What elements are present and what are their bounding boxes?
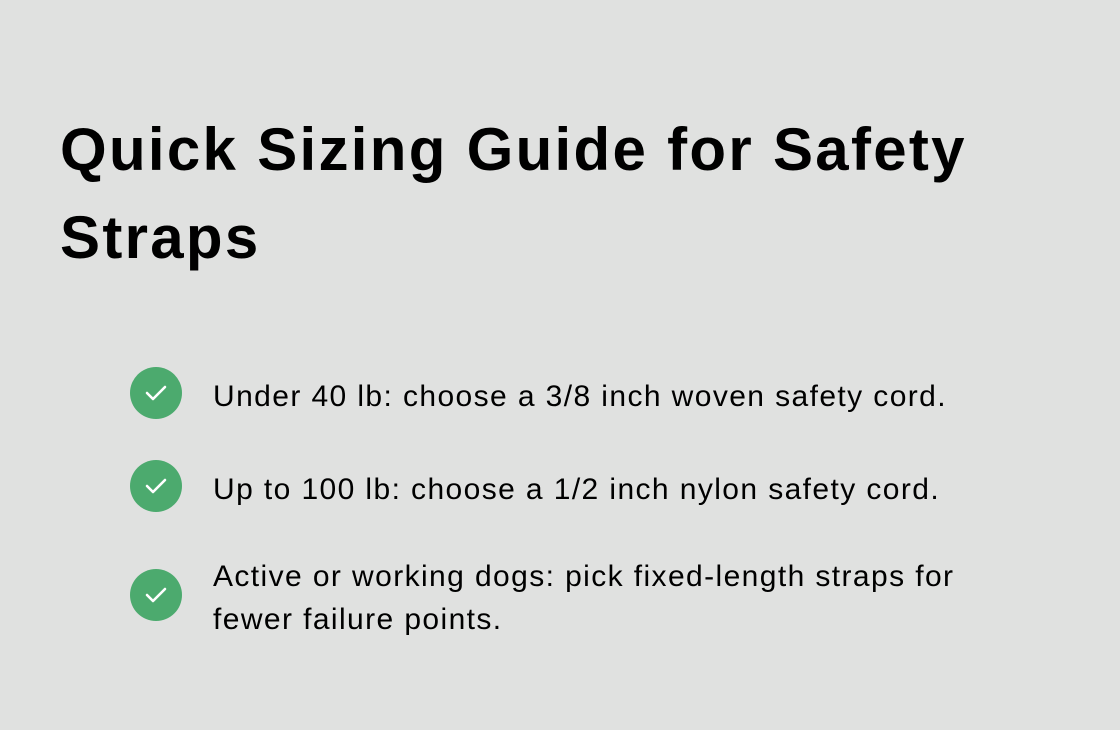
item 3: fewer failure points. bbox=[213, 603, 503, 636]
title: Straps bbox=[60, 204, 261, 271]
item 3 bbox=[130, 560, 954, 636]
title: Quick Sizing Guide for Safety bbox=[60, 116, 967, 183]
icon: check bbox=[130, 367, 182, 419]
icon: check bbox=[130, 569, 182, 621]
item 1 bbox=[130, 367, 947, 419]
item 3: Active or working dogs: pick fixed-length straps for bbox=[213, 560, 954, 593]
title bbox=[60, 116, 967, 271]
item 1: Under 40 lb: choose a 3/8 inch woven safety cord. bbox=[213, 380, 947, 412]
item 2 bbox=[130, 460, 940, 512]
item 2: Up to 100 lb: choose a 1/2 inch nylon safety cord. bbox=[213, 472, 940, 506]
icon: check bbox=[130, 460, 182, 512]
